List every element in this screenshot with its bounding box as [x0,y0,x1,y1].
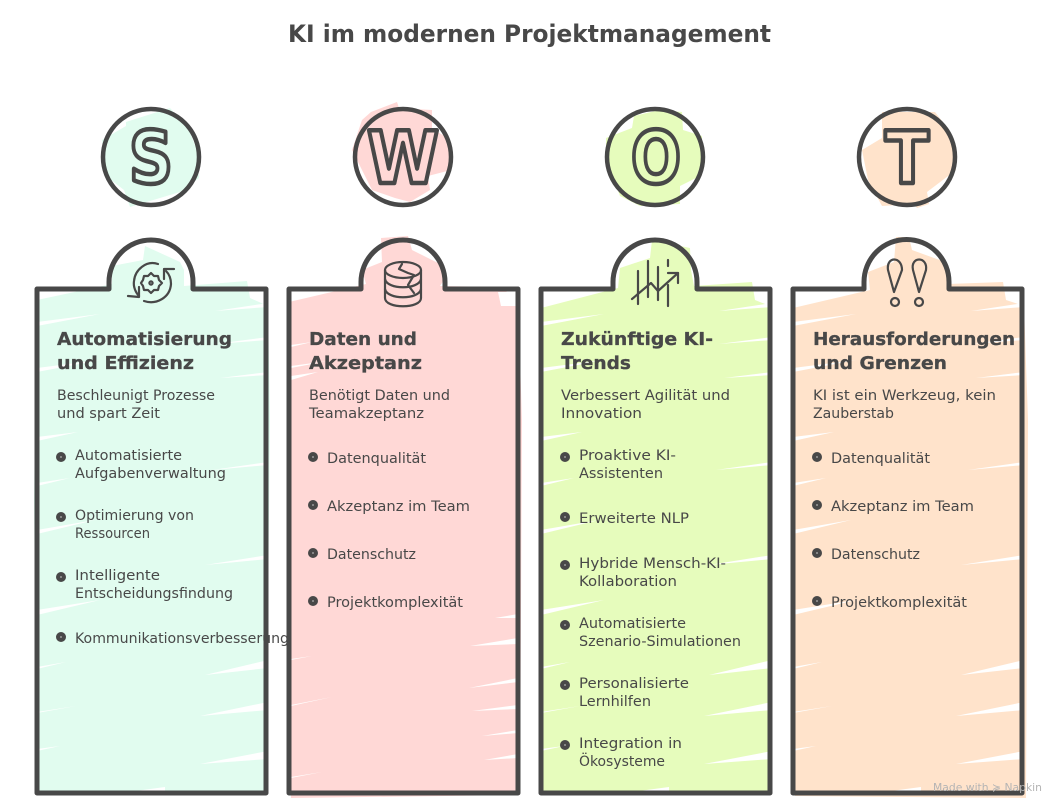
description: Beschleunigt Prozesse [57,388,215,404]
bullet list: Akzeptanz im Team [327,499,470,515]
heading: Automatisierung [57,329,232,350]
bullet list: Integration in [579,736,682,752]
icon: exclamation marks [888,260,926,306]
circle T [859,109,956,208]
title: KI im modernen Projektmanagement [288,20,771,48]
bullet list: Ökosysteme [579,752,665,770]
bullet list: Automatisierte [579,616,686,632]
bullet list: Datenqualität [831,451,931,467]
bullet list: Szenario-Simulationen [579,634,741,650]
bullet list: Kommunikationsverbesserung [75,631,289,647]
watermark: Made with ≽ Napkin [933,782,1042,794]
bullet list: Datenschutz [327,547,416,563]
panel: Herausforderungen und Grenzen: Zauberstab [813,406,894,422]
panel: Zukünftige KI-Trends: Innovation [561,406,642,422]
bullet list: Akzeptanz im Team [831,499,974,515]
panel: Daten und Akzeptanz: Akzeptanz [309,353,422,374]
bullet list: Projektkomplexität [831,595,968,611]
circle O [606,109,703,206]
circle W: W [367,116,439,200]
bullet list [812,451,974,611]
panel: Herausforderungen und Grenzen: und Grenzen [813,353,947,374]
circle W [352,102,451,205]
panel: Automatisierung und Effizienz: und Effizienz [57,353,194,374]
circle T: T [885,116,929,200]
bullet list [56,448,289,647]
panel: Herausforderungen und Grenzen [791,237,1028,798]
heading: Daten und [309,329,417,350]
bullet list: Projektkomplexität [327,595,464,611]
bullet list: Entscheidungsfindung [75,586,233,602]
description: Verbessert Agilität und [561,388,730,404]
panel: Zukünftige KI-Trends: Trends [561,353,631,374]
circle S [102,108,199,207]
bullet list: Hybride Mensch-KI- [579,556,726,572]
bullet list: Optimierung von [75,508,194,524]
bullet list [560,448,741,770]
description: Benötigt Daten und [309,388,450,404]
bullet list: Datenqualität [327,451,427,467]
icon: database [385,262,421,306]
bullet list: Personalisierte [579,676,689,692]
bullet list: Aufgabenverwaltung [75,466,226,482]
bullet list: Assistenten [579,466,663,482]
circle S: S [129,116,173,200]
bullet list: Intelligente [75,568,160,584]
icon: rising chart [632,260,678,306]
bullet list: Lernhilfen [579,694,651,710]
heading: Zukünftige KI- [561,329,713,350]
panel: Automatisierung und Effizienz: und spart Zeit [57,406,161,422]
bullet list: Kollaboration [579,574,677,590]
bullet list: Proaktive KI- [579,448,676,464]
bullet list: Erweiterte NLP [579,511,689,527]
icon: gear with cycle arrows [128,263,174,302]
panel: Daten und Akzeptanz: Teamakzeptanz [308,406,424,422]
panel: Automatisierung und Effizienz [34,240,289,795]
bullet list [308,451,470,611]
panel: Zukünftige KI-Trends [539,240,772,795]
bullet list: Datenschutz [831,547,920,563]
panel: Daten und Akzeptanz [287,236,522,798]
bullet list: Ressourcen [75,526,150,542]
heading: Herausforderungen [813,329,1015,350]
bullet list: Automatisierte [75,448,182,464]
description: KI ist ein Werkzeug, kein [813,388,996,404]
circle O: O [631,116,681,200]
